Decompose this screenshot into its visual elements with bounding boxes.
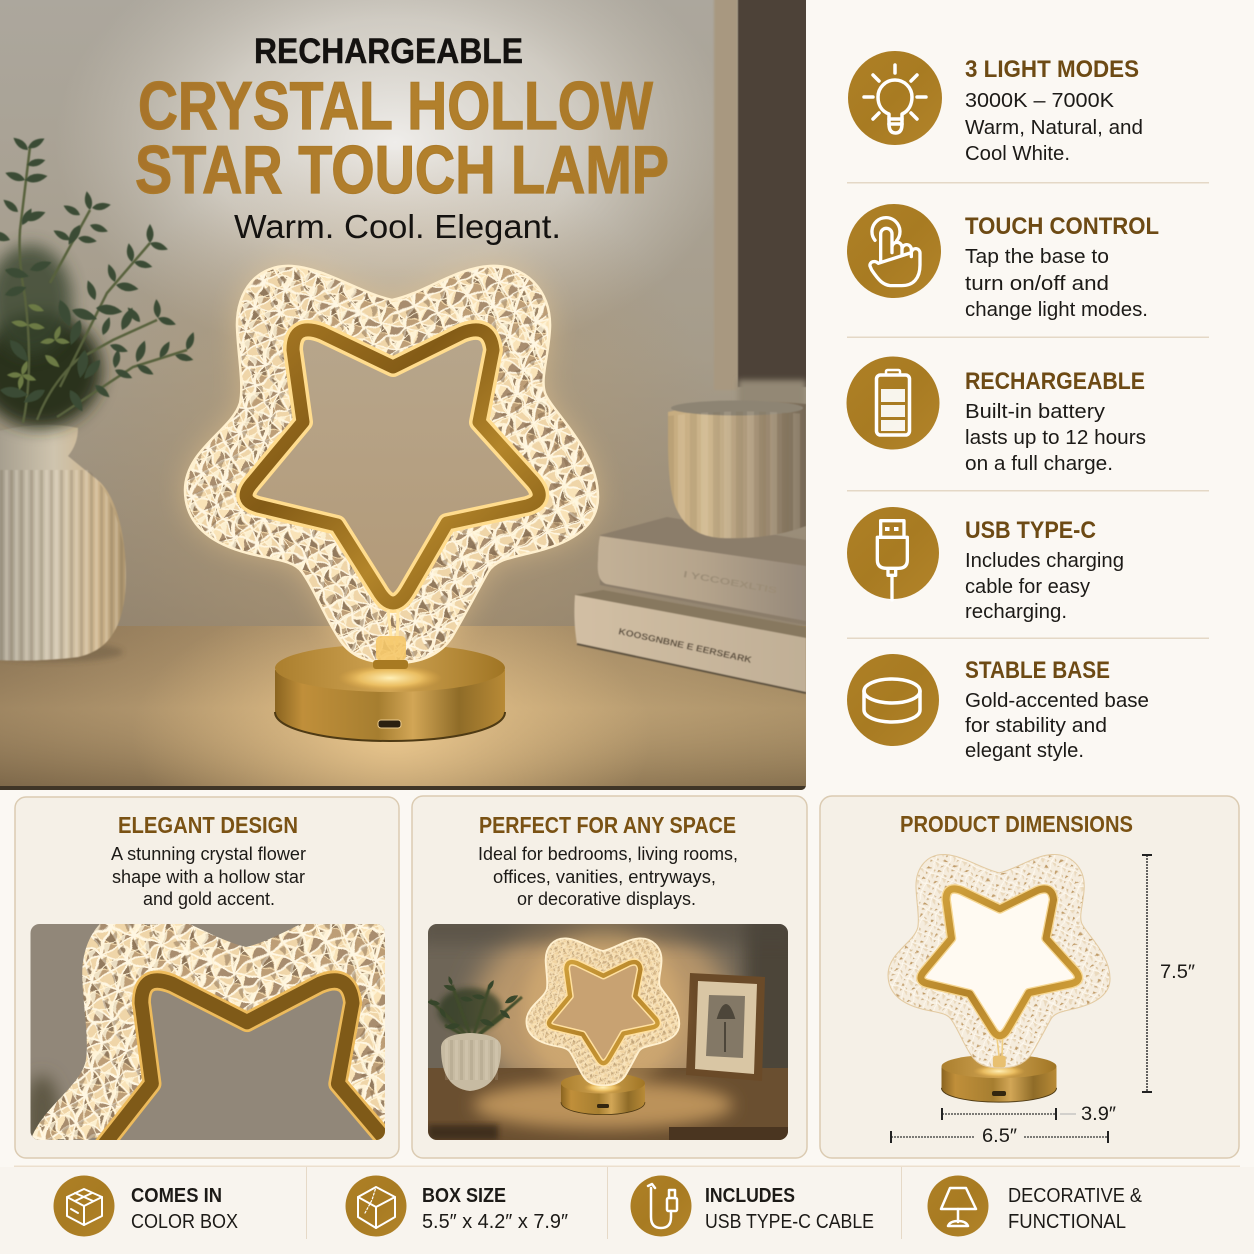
- item: box size: 5.5″ x 4.2″ x 7.9″: [422, 1211, 568, 1233]
- description: and gold accent.: [143, 889, 275, 909]
- feature: touch control: [847, 204, 1159, 321]
- icon: box: [54, 1176, 114, 1236]
- label: BOX SIZE: [422, 1185, 506, 1207]
- product cutout: star: [877, 843, 1122, 1080]
- panel: product dimensions: [820, 796, 1239, 1158]
- desk: [428, 1068, 788, 1140]
- plant: [0, 135, 197, 428]
- panel: perfect for any space: [412, 796, 807, 1158]
- label: COMES IN: [131, 1185, 222, 1207]
- feature: usb type-c: [847, 507, 1124, 623]
- usb port on base: [378, 720, 401, 728]
- item: box size: [346, 1176, 568, 1236]
- body: lasts up to 12 hours: [965, 427, 1146, 449]
- body: Includes charging: [965, 550, 1124, 572]
- close-up photo of crystal: [30, 924, 385, 1140]
- small lamp glow: [523, 930, 683, 1090]
- bottom strip: [0, 1166, 1254, 1254]
- body: Tap the base to: [965, 246, 1109, 268]
- label: DECORATIVE &: [1008, 1185, 1143, 1207]
- lamp base: [275, 644, 505, 741]
- icon: base disc: [847, 654, 939, 746]
- item: decorative and functional: FUNCTIONAL: [1008, 1211, 1126, 1233]
- small lamp star: [526, 938, 680, 1086]
- icon: touch hand: [847, 204, 941, 298]
- hero photo: lamp on table: [0, 0, 810, 790]
- label: INCLUDES: [705, 1185, 795, 1207]
- body: for stability and: [965, 715, 1107, 737]
- item: comes in color box: [54, 1176, 238, 1236]
- body: [965, 401, 1146, 475]
- heading: USB TYPE-C: [965, 517, 1096, 544]
- icon: cable: [630, 1176, 692, 1236]
- body: Built-in battery: [965, 401, 1105, 423]
- lamp crystal star shade: [184, 264, 600, 664]
- dimension: height 7.5: 7.5″: [1160, 962, 1195, 983]
- body: turn on/off and: [965, 273, 1109, 295]
- body: cable for easy: [965, 576, 1090, 598]
- heading: RECHARGEABLE: [965, 368, 1145, 395]
- stacked books: I YCCOEXLTIS: [683, 569, 778, 595]
- dimension: base 3.9: 3.9″: [1081, 1104, 1116, 1125]
- item: includes cable: USB TYPE-C CABLE: [705, 1211, 874, 1233]
- description: shape with a hollow star: [112, 867, 305, 887]
- lamp glow halo: [185, 266, 598, 663]
- description: Ideal for bedrooms, living rooms,: [478, 844, 738, 864]
- potted plant: [426, 975, 522, 1091]
- panel: elegant design: [15, 797, 434, 1158]
- body: change light modes.: [965, 299, 1148, 321]
- item: decorative and functional: [928, 1176, 1143, 1236]
- item: includes cable: [630, 1176, 874, 1236]
- dimension: width 6.5: [891, 1126, 1108, 1147]
- title: crystal hollow: CRYSTAL HOLLOW: [138, 68, 654, 144]
- ribbed cup: [668, 400, 806, 538]
- heading: STABLE BASE: [965, 657, 1110, 684]
- dimension: width 6.5: 6.5″: [982, 1126, 1017, 1147]
- dimension: height 7.5: [1142, 855, 1195, 1092]
- title: rechargeable: RECHARGEABLE: [254, 32, 523, 71]
- description: [478, 844, 738, 909]
- title block: [135, 32, 669, 245]
- heading: ELEGANT DESIGN: [118, 812, 298, 838]
- product cutout: base: [942, 1055, 1056, 1102]
- body: on a full charge.: [965, 453, 1113, 475]
- icon: table lamp: [928, 1176, 988, 1236]
- wall frame edge on right: [714, 0, 810, 410]
- description: offices, vanities, entryways,: [493, 867, 716, 887]
- item: comes in color box: COLOR BOX: [131, 1211, 238, 1233]
- stacked books: KOOSGNBNE E EERSEARK: [618, 626, 753, 665]
- description: or decorative displays.: [517, 889, 696, 909]
- crystal stem: [373, 610, 408, 669]
- ribbed vase: [0, 425, 126, 662]
- feature list: [846, 51, 1209, 762]
- body: [965, 90, 1143, 165]
- heading: PRODUCT DIMENSIONS: [900, 811, 1133, 837]
- subtitle: Warm. Cool. Elegant.: [234, 208, 561, 245]
- heading: PERFECT FOR ANY SPACE: [479, 812, 736, 838]
- feature: rechargeable: [846, 356, 1146, 475]
- heading: TOUCH CONTROL: [965, 213, 1159, 240]
- dimension: base 3.9: [942, 1104, 1116, 1125]
- body: elegant style.: [965, 740, 1084, 762]
- description: A stunning crystal flower: [111, 844, 306, 864]
- body: [965, 246, 1148, 321]
- title: star touch lamp: STAR TOUCH LAMP: [135, 132, 669, 208]
- body: Warm, Natural, and: [965, 117, 1143, 139]
- icon: battery: [846, 356, 940, 450]
- feature: stable base: [847, 654, 1149, 762]
- feature: 3 light modes: [848, 51, 1143, 165]
- icon: usb plug: [847, 507, 939, 600]
- heading: 3 LIGHT MODES: [965, 56, 1139, 83]
- body: Gold-accented base: [965, 690, 1149, 712]
- small lamp base: [561, 1073, 645, 1115]
- body: recharging.: [965, 601, 1067, 623]
- picture frame: [686, 973, 765, 1081]
- icon: light bulb: [848, 51, 942, 145]
- room photo: [428, 924, 788, 1140]
- body: [965, 690, 1149, 762]
- description: [111, 844, 306, 909]
- icon: wire cube: [346, 1176, 406, 1236]
- body: Cool White.: [965, 143, 1070, 165]
- table top: [0, 626, 806, 790]
- stacked books: [574, 517, 806, 693]
- body: [965, 550, 1124, 623]
- body: 3000K – 7000K: [965, 90, 1115, 112]
